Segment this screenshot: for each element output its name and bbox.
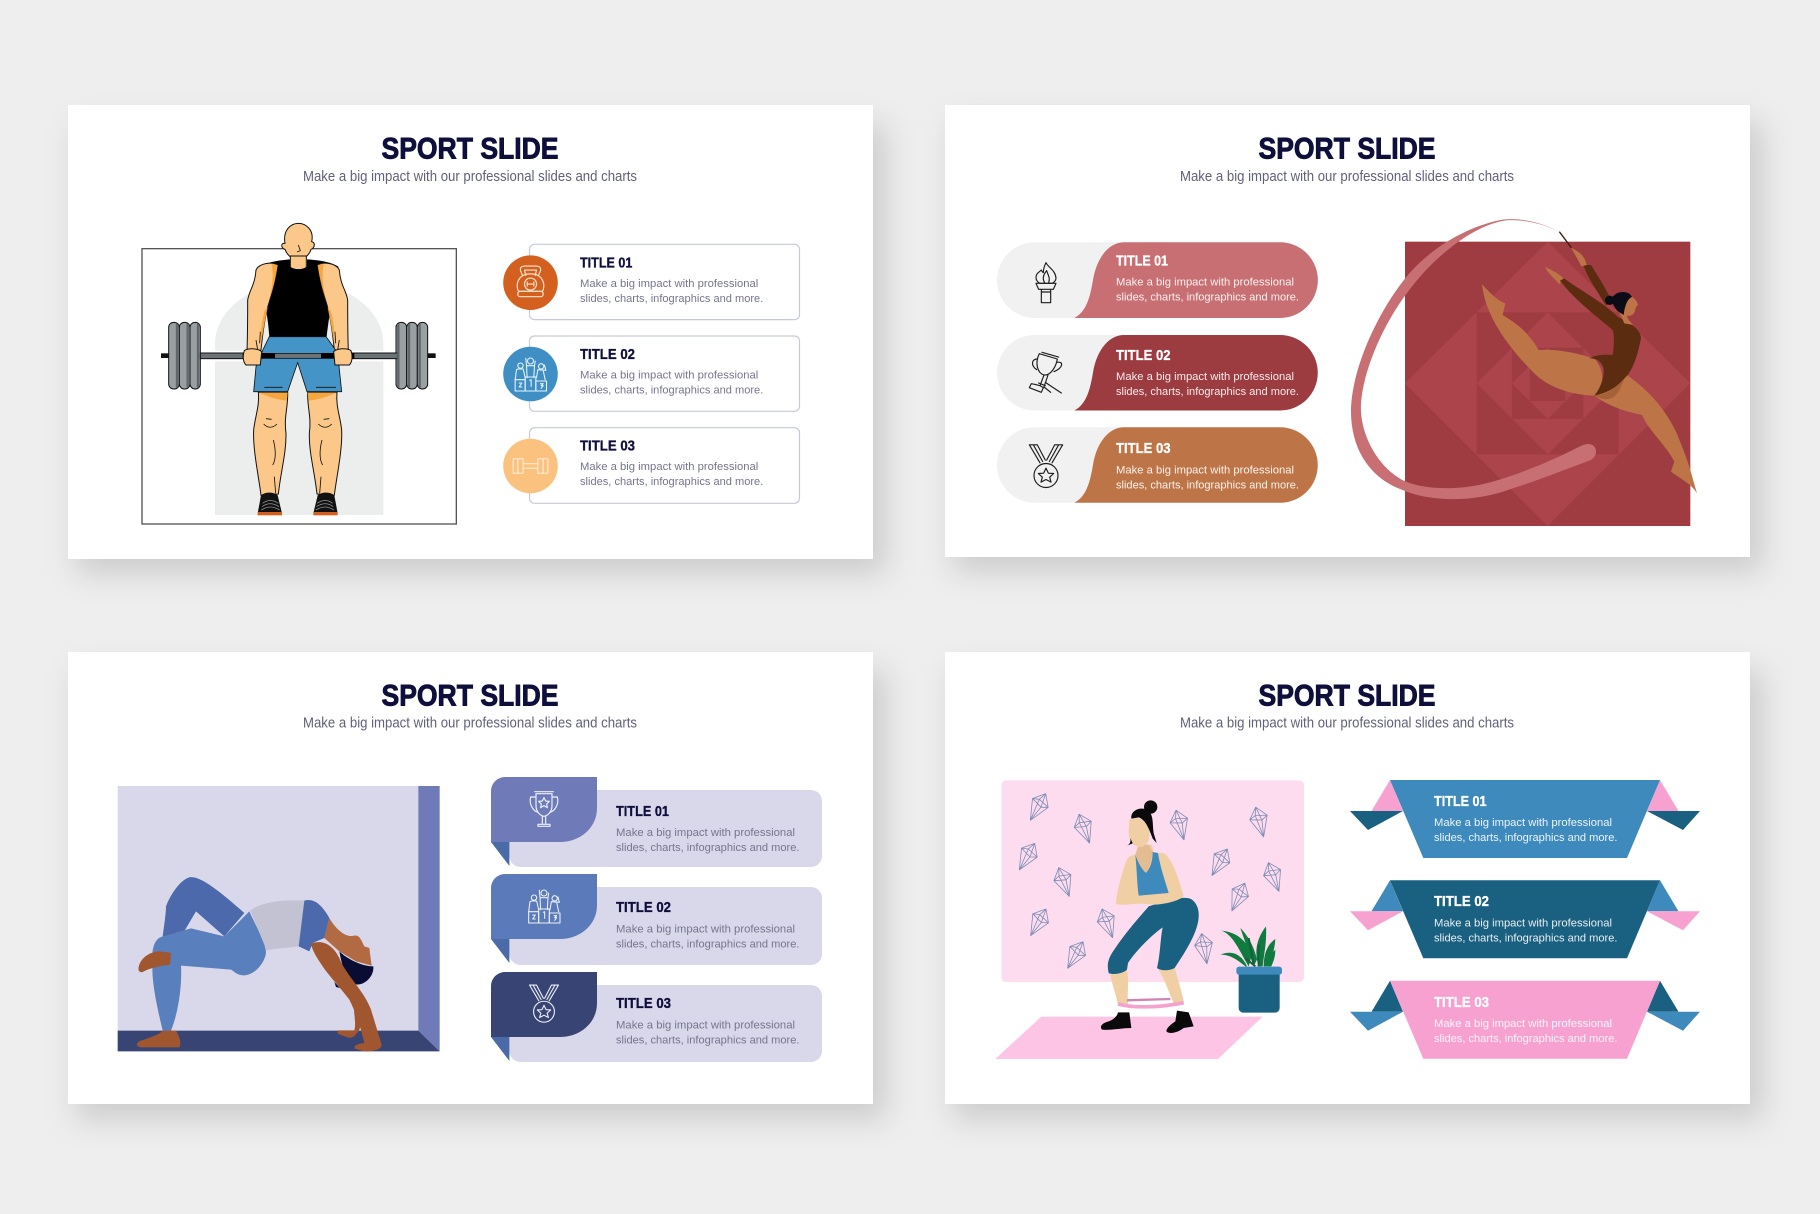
row 03 with medal icon: TITLE 03	[1116, 441, 1170, 457]
row 02 with trophy icon: slides, charts, infographics and more.	[1116, 386, 1299, 398]
list: three pill rows	[997, 242, 1318, 503]
list: three titled cards	[503, 244, 800, 503]
panel background	[68, 105, 873, 559]
subtitle: Make a big impact with our professional slides and charts	[1180, 716, 1514, 732]
subtitle: Make a big impact with our professional slides and charts	[303, 716, 637, 732]
illustration: weightlifter with barbell	[142, 223, 456, 524]
title: SPORT SLIDE	[1258, 132, 1436, 166]
panel background	[945, 652, 1750, 1104]
ribbon 03	[1350, 981, 1700, 1059]
ribbon 02: TITLE 02	[1434, 894, 1489, 910]
ribbon 01: Make a big impact with professional	[1434, 817, 1612, 829]
panel: rhythmic gymnastics slide	[945, 105, 1750, 557]
row 01 with torch icon: TITLE 01	[1116, 253, 1168, 269]
illustration: woman squatting with resistance band	[995, 780, 1304, 1059]
ribbon 01: TITLE 01	[1434, 794, 1486, 810]
card 01 with kettlebell icon	[503, 244, 800, 320]
ribbon 03: slides, charts, infographics and more.	[1434, 1033, 1618, 1045]
ribbon 03: Make a big impact with professional	[1434, 1018, 1612, 1030]
row 02 with trophy icon: TITLE 02	[1116, 348, 1170, 364]
card 01 with kettlebell icon: TITLE 01	[580, 255, 632, 271]
card 03 with dumbbell icon: Make a big impact with professional	[580, 461, 758, 473]
ribbon 02: Make a big impact with professional	[1434, 918, 1612, 930]
row 03 with medal icon: slides, charts, infographics and more.	[1116, 479, 1299, 491]
card 02 with podium icon: slides, charts, infographics and more.	[580, 384, 763, 396]
card 01 with kettlebell icon: Make a big impact with professional	[580, 278, 758, 290]
card 02 with podium icon: Make a big impact with professional	[616, 924, 795, 936]
card 03 with dumbbell icon: slides, charts, infographics and more.	[580, 476, 763, 488]
row 03 with medal icon: Make a big impact with professional	[1116, 464, 1294, 476]
panel: weightlifting slide	[68, 105, 873, 559]
card 03 with medal icon: TITLE 03	[616, 996, 671, 1012]
row 02 with trophy icon: Make a big impact with professional	[1116, 371, 1294, 383]
card 02 with podium icon: TITLE 02	[616, 900, 671, 916]
card 01 with trophy icon: slides, charts, infographics and more.	[616, 842, 800, 854]
title: SPORT SLIDE	[382, 132, 558, 166]
row 02 with trophy icon	[997, 335, 1318, 410]
card 03 with medal icon	[491, 972, 822, 1062]
row 01 with torch icon	[997, 242, 1318, 318]
ribbon 01	[1350, 780, 1700, 858]
card 01 with trophy icon: TITLE 01	[616, 804, 669, 820]
illustration: yoga bridge pose in room	[118, 786, 440, 1051]
row 03 with medal icon	[997, 427, 1318, 503]
card 01 with trophy icon	[491, 777, 822, 867]
card 03 with medal icon: Make a big impact with professional	[616, 1020, 795, 1032]
card 03 with dumbbell icon: TITLE 03	[580, 439, 635, 455]
ribbon 02: slides, charts, infographics and more.	[1434, 932, 1618, 944]
card 03 with dumbbell icon	[503, 428, 800, 503]
subtitle: Make a big impact with our professional slides and charts	[303, 169, 637, 185]
row 01 with torch icon: Make a big impact with professional	[1116, 276, 1294, 288]
card 02 with podium icon	[503, 336, 800, 411]
title: SPORT SLIDE	[382, 680, 558, 712]
subtitle: Make a big impact with our professional slides and charts	[1180, 169, 1514, 185]
panel: yoga slide	[68, 652, 873, 1104]
ribbon 01: slides, charts, infographics and more.	[1434, 832, 1618, 844]
title: SPORT SLIDE	[1258, 680, 1436, 712]
card 02 with podium icon	[491, 874, 822, 965]
ribbon 02	[1350, 880, 1700, 958]
card 02 with podium icon: Make a big impact with professional	[580, 370, 758, 382]
illustration: gymnast with ribbon	[1351, 219, 1697, 526]
list: three ribbon banners	[1350, 780, 1700, 1059]
list: three tabbed cards	[491, 777, 822, 1062]
ribbon 03: TITLE 03	[1434, 995, 1489, 1011]
card 01 with trophy icon: Make a big impact with professional	[616, 827, 795, 839]
row 01 with torch icon: slides, charts, infographics and more.	[1116, 291, 1299, 303]
card 02 with podium icon: slides, charts, infographics and more.	[616, 938, 800, 950]
card 03 with medal icon: slides, charts, infographics and more.	[616, 1034, 800, 1046]
card 01 with kettlebell icon: slides, charts, infographics and more.	[580, 293, 763, 305]
panel background	[68, 652, 873, 1104]
card 02 with podium icon: TITLE 02	[580, 347, 635, 363]
panel: resistance band squat slide	[945, 652, 1750, 1104]
panel background	[945, 105, 1750, 557]
